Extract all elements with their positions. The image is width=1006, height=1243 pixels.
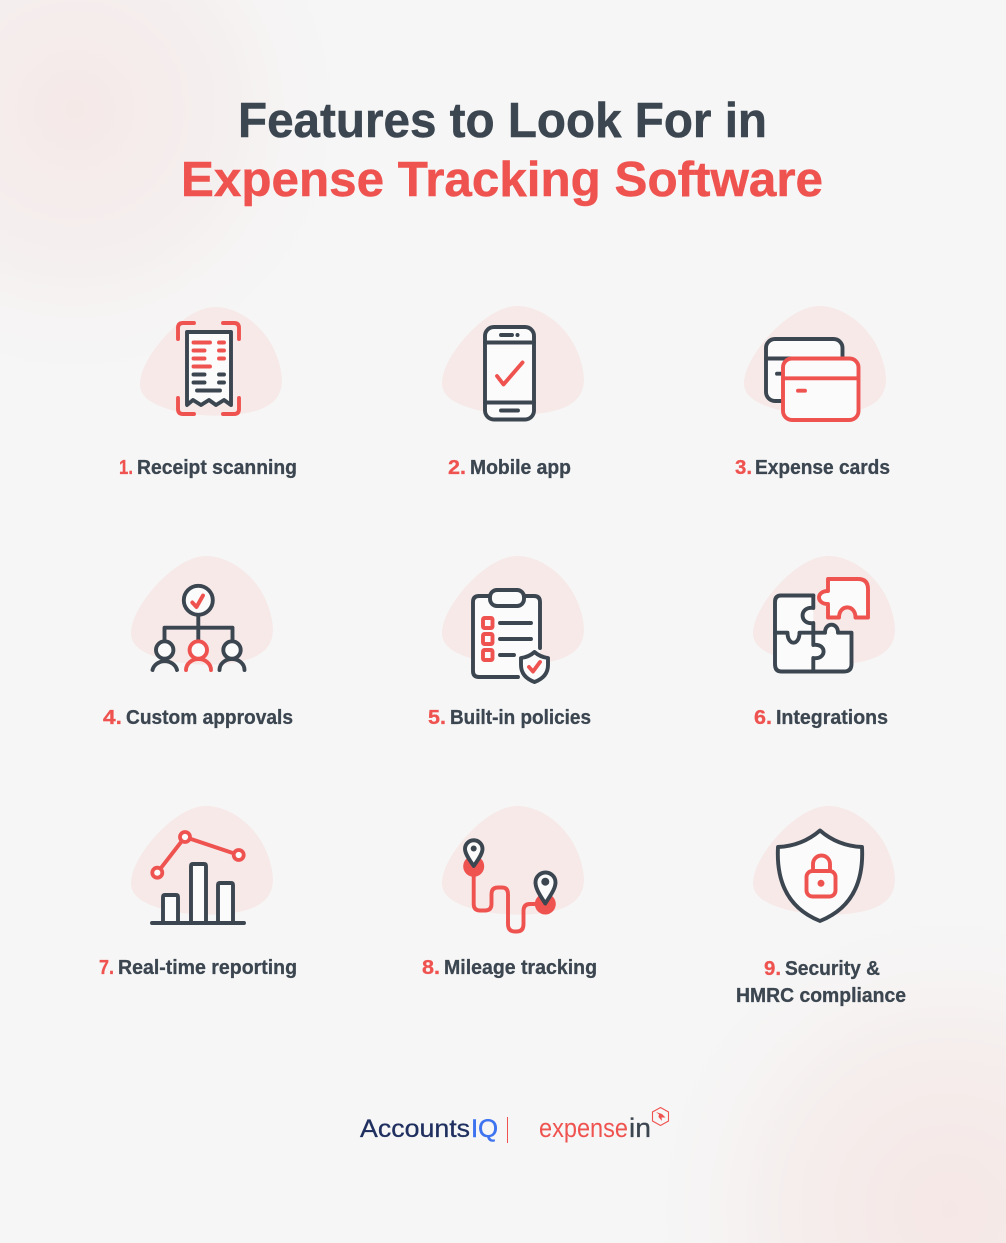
icon: shield with lock [778,830,862,921]
label: receipt scanning: 1. [119,456,133,479]
logo: AccountsIQ: Accounts [360,1115,470,1143]
title: Expense Tracking Software [181,153,823,207]
label: integrations: 6. [754,706,772,729]
divider [507,1117,508,1143]
logo: AccountsIQ: IQ [471,1115,498,1143]
icon: clipboard with shield [473,590,548,682]
label: security and compliance: HMRC compliance [736,984,906,1007]
label: built-in policies: Built-in policies [450,706,591,729]
panel: real-time reporting [99,806,297,979]
label: security and compliance: Security & [785,957,880,980]
panel: custom approvals [103,556,293,729]
label: security and compliance [736,957,906,1007]
panel: integrations [753,556,895,729]
panel: expense cards [735,306,890,479]
label: real-time reporting: 7. [99,956,114,979]
logo: expensein: in [629,1113,651,1143]
label: receipt scanning: Receipt scanning [137,456,297,479]
icon: phone [485,327,534,420]
label: mobile app: Mobile app [470,456,571,479]
panel: built-in policies [428,556,591,729]
label: custom approvals: 4. [103,706,122,729]
icon: chart [152,832,244,923]
icon: route with pins [463,840,556,932]
label: mileage tracking: 8. [422,956,440,979]
logo: expensein [539,1108,668,1143]
label: security and compliance: 9. [764,957,781,980]
logo: expensein: expense [539,1113,628,1143]
panel: mobile app [442,306,584,479]
label: expense cards: 3. [735,456,752,479]
panel: mileage tracking [422,806,597,979]
title [181,94,823,207]
label: real-time reporting: Real-time reporting [118,956,297,979]
icon: org chart [152,586,244,670]
icon: cards [766,339,858,420]
title: Features to Look For in [238,94,767,148]
panel: security and compliance [736,806,906,1007]
label: built-in policies: 5. [428,706,446,729]
icon: puzzle [775,579,868,672]
label: custom approvals: Custom approvals [126,706,293,729]
label: mileage tracking: Mileage tracking [444,956,597,979]
label: expense cards: Expense cards [755,456,890,479]
icon: receipt [178,323,239,414]
label: integrations: Integrations [776,706,888,729]
panel: receipt scanning [119,307,297,479]
label: mobile app: 2. [448,456,466,479]
